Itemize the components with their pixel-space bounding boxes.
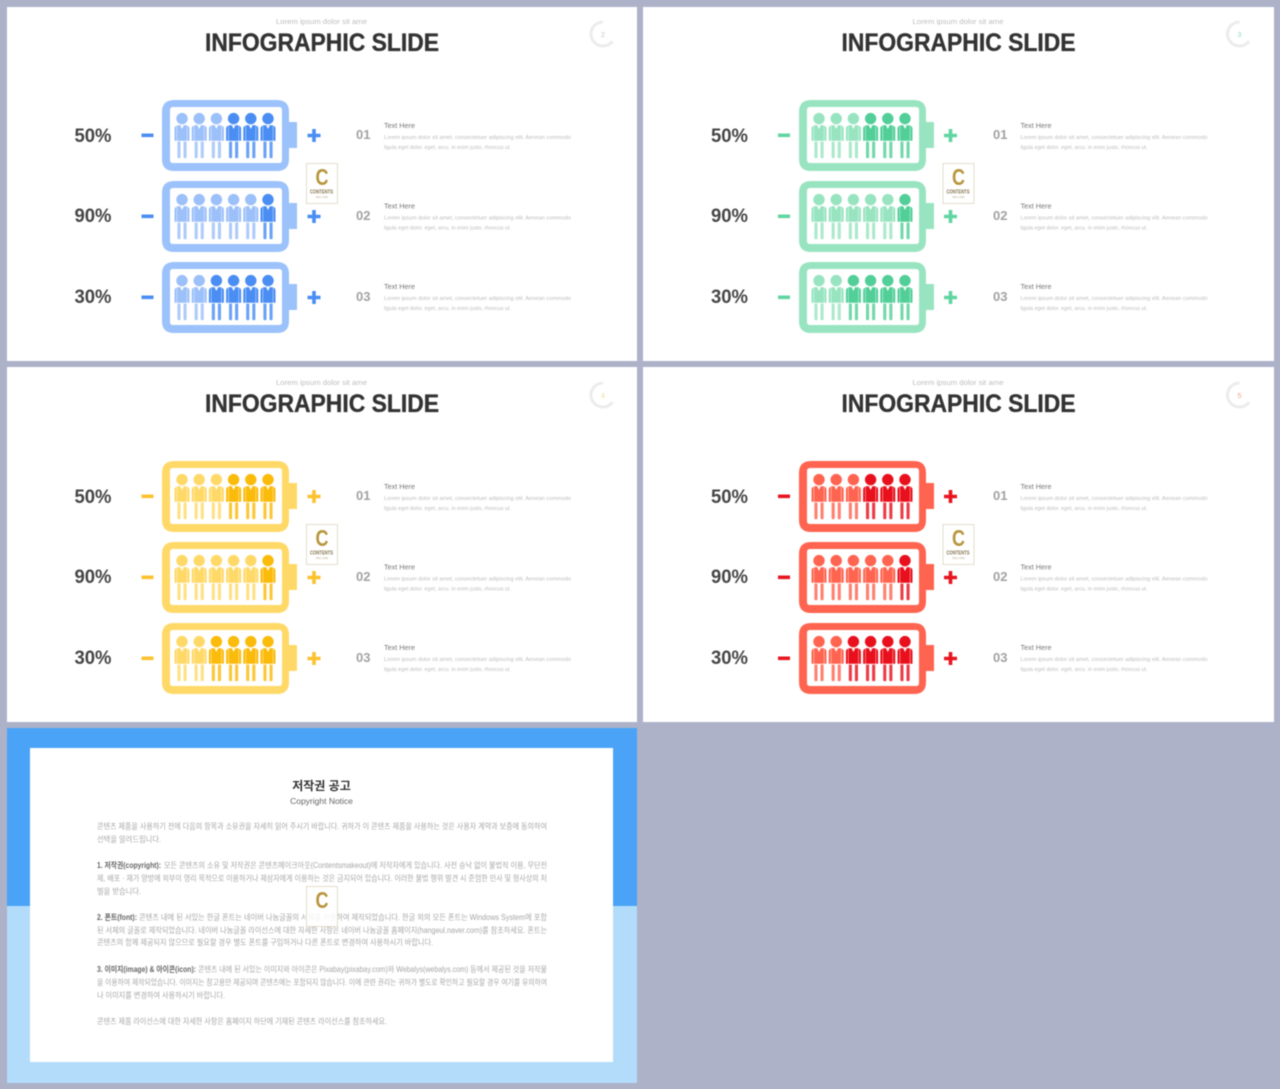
closing line: 콘텐츠 제품 라이선스에 대한 자세한 사항은 홈페이지 하단에 기재된 콘텐츠 라이선스를 참조하세요. (97, 1016, 387, 1026)
logo (943, 524, 974, 564)
description: Lorem ipsum dolor sit amet, consectetuer adipiscing elit. Aenean commodo (384, 216, 571, 222)
section 2: font: 콘텐츠 내에 된 서있는 한글 폰트는 네이버 나눔글꼴의 서체를 이용하여 제작되었습니다. 한글 외의 모든 폰트는 Windows System에 포함 (139, 912, 548, 922)
description: Text Here (1020, 202, 1052, 210)
logo (306, 524, 338, 564)
description: ligula eget dolor. eget, arcu. in enim justo, rhoncus ut. (384, 145, 511, 151)
battery with people (162, 461, 297, 532)
title: INFOGRAPHIC SLIDE (205, 30, 439, 57)
percent: 30% (711, 648, 748, 669)
plus (944, 652, 957, 665)
description: Text Here (384, 643, 415, 652)
section 1: copyright: 제, 배포 · 재가 양방에 외부이 영리 목적으로 이용하거나 제삼자에게 이용하는 것은 금지되어 있습니다. 이러한 불법 행위 발견 시 준엄한 민사 및 형사상의 처 (97, 873, 547, 883)
percent: 90% (711, 567, 748, 588)
title: INFOGRAPHIC SLIDE (205, 391, 439, 418)
description (384, 643, 571, 673)
number: 03 (356, 289, 370, 304)
plus (944, 490, 957, 503)
number: 01 (356, 127, 370, 142)
description: Text Here (1020, 282, 1052, 291)
description: ligula eget dolor. eget, arcu. in enim justo, rhoncus ut. (1020, 306, 1148, 312)
battery with people (799, 623, 934, 694)
percent: 90% (74, 206, 112, 227)
percent: 30% (711, 287, 748, 308)
description: ligula eget dolor. eget, arcu. in enim justo, rhoncus ut. (1020, 667, 1148, 673)
number: 02 (993, 569, 1007, 584)
description (384, 562, 571, 592)
minus (142, 296, 154, 299)
description (384, 202, 571, 232)
description (1020, 482, 1208, 512)
description: Lorem ipsum dolor sit amet, consectetuer adipiscing elit. Aenean commodo (384, 576, 571, 582)
row 2: 90% (711, 181, 1208, 252)
description: ligula eget dolor. eget, arcu. in enim justo, rhoncus ut. (1020, 226, 1148, 232)
description: ligula eget dolor. eget, arcu. in enim justo, rhoncus ut. (384, 226, 511, 232)
number: 01 (356, 488, 370, 503)
minus (778, 656, 790, 660)
intro paragraph: 선택을 알려드립니다. (97, 834, 161, 844)
page badge: 4 (601, 393, 605, 400)
description: Lorem ipsum dolor sit amet, consectetuer adipiscing elit. Aenean commodo (384, 496, 571, 502)
intro paragraph (97, 821, 547, 844)
logo: REAL CODE (952, 196, 965, 199)
plus (308, 652, 320, 665)
number: 03 (993, 650, 1007, 665)
description: Text Here (384, 562, 415, 572)
section 3: image and icon: 나 이미지를 변경하여 사용하시기 바랍니다. (97, 990, 225, 1000)
description (384, 121, 571, 151)
description: Lorem ipsum dolor sit amet, consectetuer adipiscing elit. Aenean commodo (1020, 496, 1208, 502)
percent: 30% (74, 648, 112, 669)
logo: CONTENTS (946, 190, 970, 196)
logo: REAL CODE (316, 557, 328, 560)
description: Text Here (1020, 643, 1052, 652)
description: ligula eget dolor. eget, arcu. in enim justo, rhoncus ut. (384, 306, 511, 312)
panel: copyright notice (7, 728, 637, 1083)
percent: 50% (74, 487, 112, 508)
minus (142, 494, 154, 498)
row 2: 90% (711, 542, 1208, 613)
row 1: 50% (74, 100, 571, 171)
page badge: 3 (1238, 32, 1242, 39)
description: ligula eget dolor. eget, arcu. in enim justo, rhoncus ut. (1020, 145, 1148, 151)
description: Lorem ipsum dolor sit amet, consectetuer adipiscing elit. Aenean commodo (1020, 657, 1208, 663)
battery with people (162, 100, 297, 171)
logo (306, 886, 338, 926)
description: Lorem ipsum dolor sit amet, consectetuer adipiscing elit. Aenean commodo (384, 657, 571, 663)
section 3: image and icon: 을 이용하여 제작되었습니다. 이미지는 참고용만 제공되며 콘텐츠에는 포함되지 않습니다. 이에 관련 권리는 귀하가 별도로 확인하고 필요할 경우 여기를 유의하여 (97, 977, 547, 987)
subtitle: Lorem ipsum dolor sit ame (912, 380, 1004, 387)
battery with people (799, 461, 934, 532)
description (1020, 643, 1208, 673)
description: Text Here (1020, 562, 1052, 572)
logo: CONTENTS (310, 190, 334, 196)
row 1: 50% (711, 461, 1208, 532)
page badge (1227, 383, 1249, 407)
title: INFOGRAPHIC SLIDE (842, 391, 1076, 418)
logo: C (952, 164, 965, 190)
description: Text Here (384, 482, 415, 491)
page badge (591, 22, 612, 46)
percent: 50% (74, 126, 112, 147)
description: Text Here (384, 282, 415, 291)
logo: C (316, 164, 328, 190)
section 1: copyright: 벌을 받습니다. (97, 886, 141, 896)
description (1020, 121, 1208, 151)
description: Lorem ipsum dolor sit amet, consectetuer adipiscing elit. Aenean commodo (384, 135, 571, 141)
logo: REAL CODE (316, 196, 328, 199)
plus (944, 571, 957, 584)
section 3: image and icon: 3. 이미지(image) & 아이콘(icon): (97, 964, 196, 974)
description: Text Here (384, 202, 415, 210)
battery with people (799, 262, 934, 333)
number: 01 (993, 488, 1007, 503)
percent: 90% (711, 206, 748, 227)
plus (944, 210, 957, 223)
section 3: image and icon: 콘텐츠 내에 된 서있는 이미지와 아이콘은 Pixabay(pixabay.com)와 Webalys(webalys.com) 등에서 제공된 것을 저작물 (198, 964, 547, 974)
description (1020, 282, 1208, 312)
description: ligula eget dolor. eget, arcu. in enim justo, rhoncus ut. (384, 506, 511, 512)
description: Lorem ipsum dolor sit amet, consectetuer adipiscing elit. Aenean commodo (1020, 135, 1208, 141)
logo (943, 164, 974, 204)
title: INFOGRAPHIC SLIDE (842, 30, 1076, 57)
description: Lorem ipsum dolor sit amet, consectetuer adipiscing elit. Aenean commodo (1020, 576, 1208, 582)
section 3: image and icon (97, 964, 547, 1000)
plus (308, 210, 320, 223)
plus (308, 490, 320, 503)
row 2: 90% (74, 181, 571, 252)
number: 03 (993, 289, 1007, 304)
section 1: copyright: 1. 저작권(copyright): (97, 860, 161, 870)
percent: 50% (711, 126, 748, 147)
panel: yellow slide (7, 367, 637, 722)
logo: CONTENTS (310, 550, 334, 556)
panel: blue slide (7, 7, 637, 361)
battery with people (162, 623, 297, 694)
description: Lorem ipsum dolor sit amet, consectetuer adipiscing elit. Aenean commodo (384, 296, 571, 302)
plus (944, 291, 957, 304)
description (384, 482, 571, 512)
minus (778, 494, 790, 498)
row 3: 30% (74, 262, 571, 333)
description: Lorem ipsum dolor sit amet, consectetuer adipiscing elit. Aenean commodo (1020, 296, 1208, 302)
page badge: 5 (1238, 393, 1242, 400)
subtitle: Lorem ipsum dolor sit ame (276, 19, 367, 26)
description (384, 282, 571, 312)
minus (778, 214, 790, 218)
page badge (1227, 22, 1249, 46)
notice heading: 저작권 공고 (292, 778, 351, 793)
minus (142, 656, 154, 660)
logo: CONTENTS (946, 550, 970, 556)
panel: red slide (643, 367, 1274, 722)
description: ligula eget dolor. eget, arcu. in enim justo, rhoncus ut. (384, 667, 511, 673)
description (1020, 562, 1208, 592)
description: ligula eget dolor. eget, arcu. in enim justo, rhoncus ut. (1020, 506, 1148, 512)
plus (308, 291, 320, 304)
plus (308, 571, 320, 584)
number: 02 (356, 569, 370, 584)
logo: C (952, 525, 965, 551)
logo: C (316, 887, 328, 913)
panel: green slide (643, 7, 1274, 361)
subtitle: Lorem ipsum dolor sit ame (276, 380, 367, 387)
row 2: 90% (74, 542, 571, 613)
description: Text Here (384, 121, 415, 130)
description (1020, 202, 1208, 232)
subtitle: Lorem ipsum dolor sit ame (912, 19, 1004, 26)
battery with people (799, 542, 934, 613)
battery with people (162, 542, 297, 613)
section 1: copyright (97, 860, 547, 896)
battery with people (162, 181, 297, 252)
plus (308, 129, 320, 142)
row 1: 50% (711, 100, 1208, 171)
logo: REAL CODE (952, 557, 965, 560)
row 3: 30% (711, 623, 1208, 694)
description: Lorem ipsum dolor sit amet, consectetuer adipiscing elit. Aenean commodo (1020, 216, 1208, 222)
number: 02 (993, 208, 1007, 223)
number: 03 (356, 650, 370, 665)
minus (142, 214, 154, 218)
row 3: 30% (74, 623, 571, 694)
battery with people (162, 262, 297, 333)
minus (778, 576, 790, 579)
intro paragraph: 콘텐츠 제품을 사용하기 전에 다음의 항목과 소유권을 자세히 읽어 주시기 바랍니다. 귀하가 이 콘텐츠 제품을 사용하는 것은 사용자 계약과 보증에 동의하여 (97, 821, 547, 831)
section 2: font: 2. 폰트(font): (97, 913, 137, 922)
minus (778, 296, 790, 299)
page badge (591, 383, 612, 407)
section 2: font: 콘텐츠의 함께 제공되지 않으므로 필요할 경우 별도 폰트를 구입하거나 다른 폰트로 변경하여 사용하시기 바랍니다. (97, 937, 433, 947)
percent: 30% (74, 287, 112, 308)
section 2: font: 된 서체의 글꼴로 제작되었습니다. 네이버 나눔글꼴 라이선스에 대한 자세한 사항은 네이버 나눔글꼴 홈페이지(hangeul.naver.com)를 참조하세요. 폰트는 (97, 925, 547, 935)
number: 02 (356, 208, 370, 223)
description: Text Here (1020, 482, 1052, 491)
row 1: 50% (74, 461, 571, 532)
battery with people (799, 181, 934, 252)
description: ligula eget dolor. eget, arcu. in enim justo, rhoncus ut. (384, 586, 511, 592)
percent: 90% (74, 567, 112, 588)
description: Text Here (1020, 121, 1052, 130)
plus (944, 129, 957, 142)
section 1: copyright: 모든 콘텐츠의 소유 및 저작권은 콘텐츠메이크아웃(Contentsmakeout)에 저작자에게 있습니다. 사전 승낙 없이 불법적 이용, 무단전 (164, 860, 547, 870)
row 3: 30% (711, 262, 1208, 333)
minus (778, 134, 790, 137)
number: 01 (993, 127, 1007, 142)
notice subheading: Copyright Notice (290, 796, 353, 806)
logo (306, 164, 338, 204)
section 2: font (97, 912, 548, 947)
percent: 50% (711, 487, 748, 508)
minus (142, 576, 154, 579)
page badge: 2 (601, 32, 605, 39)
minus (142, 134, 154, 137)
logo: C (316, 525, 328, 551)
battery with people (799, 100, 934, 171)
description: ligula eget dolor. eget, arcu. in enim justo, rhoncus ut. (1020, 586, 1148, 592)
